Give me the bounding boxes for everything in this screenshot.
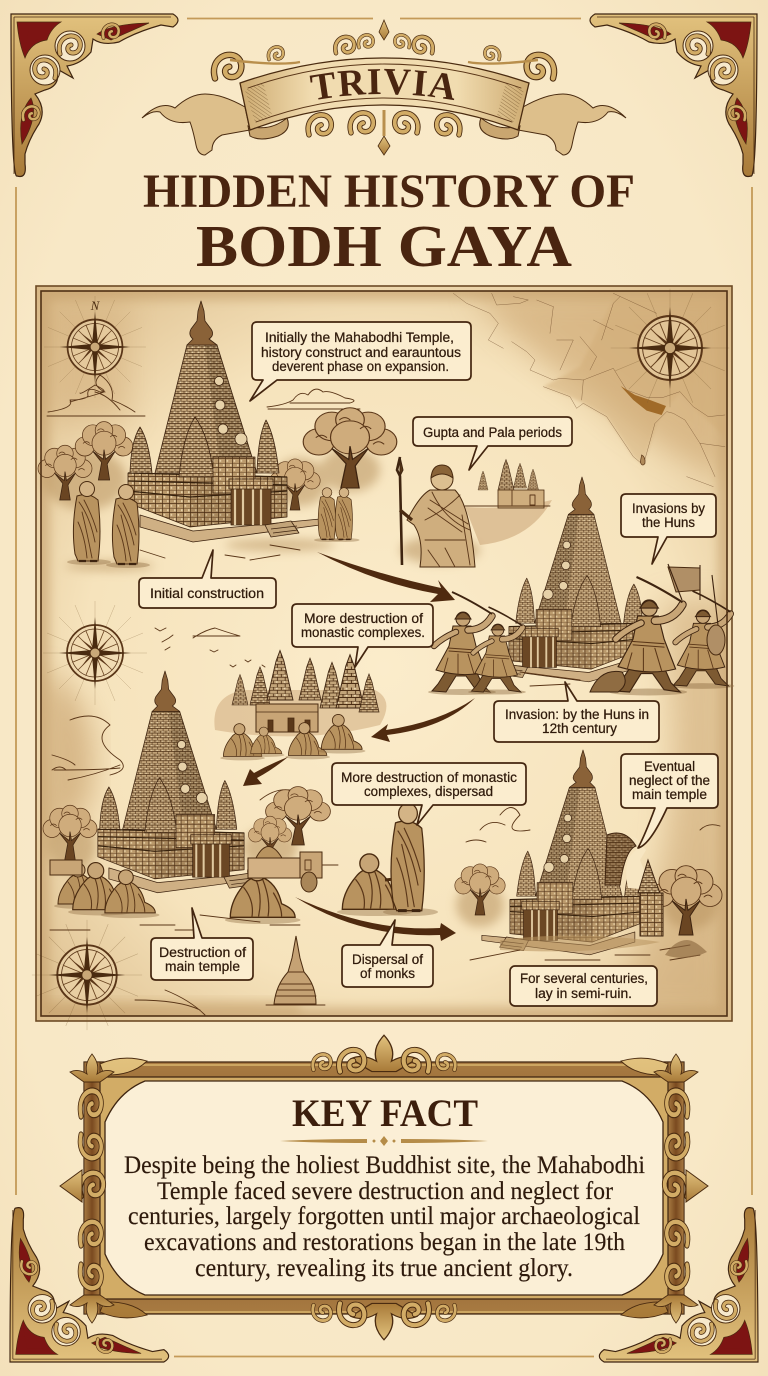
decorative corner: top left	[11, 14, 178, 176]
callout: semi-ruin: For several centuries,	[520, 971, 648, 986]
temple: semi-ruin	[470, 750, 707, 960]
temple: initial construction	[128, 301, 320, 542]
callout: dispersal of monks: Dispersal of	[352, 952, 423, 967]
callout: Initial construction: Initial construction	[150, 586, 264, 601]
callout: neglect of main temple: Eventual	[644, 759, 695, 774]
key fact body text	[124, 1152, 645, 1282]
ribbon band	[240, 58, 529, 130]
callout: destruction of main temple: Destruction of	[159, 945, 246, 960]
key fact body text: centuries, largely forgotten until major archaeological	[128, 1203, 640, 1230]
temple: destruction scene	[98, 671, 274, 893]
arrow: complex to main temple	[243, 757, 288, 786]
left ribbon tail	[142, 94, 250, 155]
ribbon folds	[248, 118, 520, 139]
callout: destruction of monastic complexes	[292, 604, 433, 667]
trivia text: TRIVIA	[310, 68, 454, 100]
stupa	[135, 936, 325, 1015]
decorative corner: bottom left	[10, 1208, 169, 1362]
callout: neglect of main temple: neglect of the	[629, 773, 710, 788]
compass rose: top left	[44, 296, 146, 398]
title line 2: BODH GAYA	[196, 213, 572, 279]
monastic complex	[214, 651, 386, 760]
compass rose: middle left	[43, 601, 147, 705]
callout: initial temple description: deverent phase on expansion.	[272, 359, 449, 374]
panel: illustrated timeline map	[32, 286, 734, 1030]
compass rose: bottom left	[32, 920, 142, 1030]
arrow: first temple to invasion	[317, 552, 455, 602]
callout: destruction of monastic complexes: monastic complexes.	[301, 625, 425, 640]
trees and foliage	[38, 408, 722, 935]
callout: Huns in 12th century: 12th century	[542, 721, 617, 736]
map panel inner border	[41, 291, 727, 1016]
title line 1: HIDDEN HISTORY OF	[143, 165, 635, 218]
key fact body text: Despite being the holiest Buddhist site, the Mahabodhi	[124, 1152, 645, 1179]
callout: Invasions by the Huns	[621, 494, 716, 564]
map of South Asia	[453, 293, 725, 487]
title	[143, 165, 635, 279]
clouds and birds	[47, 375, 720, 842]
callout: destruction of monastic complexes: More destruction of	[304, 611, 423, 626]
compass rose: top right	[611, 289, 729, 407]
banner flourishes	[214, 20, 554, 155]
callout: Invasions by the Huns: Invasions by	[632, 501, 705, 516]
callout: neglect of main temple: main temple	[632, 787, 707, 802]
arrow: invasion to monastic complex	[371, 698, 475, 742]
callout: monastic complexes dispersed: complexes, dispersad	[364, 784, 493, 799]
panel: key fact frame	[60, 1035, 708, 1340]
arrow: temple to semi-ruin	[295, 897, 456, 941]
callout: initial temple description	[250, 322, 471, 401]
callout: monastic complexes dispersed	[332, 763, 526, 825]
callout: semi-ruin: lay in semi-ruin.	[535, 986, 632, 1001]
frame crests and corner leaves	[60, 1035, 708, 1340]
trivia banner	[142, 19, 626, 156]
temple: invasion scene	[481, 477, 644, 682]
callout: Gupta and Pala periods: Gupta and Pala periods	[423, 425, 562, 440]
callout: monastic complexes dispersed: More destruction of monastic	[341, 770, 517, 785]
callout: semi-ruin	[510, 966, 657, 1006]
small shrine buildings	[50, 846, 338, 892]
callout: Invasions by the Huns: the Huns	[642, 515, 695, 530]
compass rose: top left: N	[90, 299, 101, 313]
decorative corner: bottom right	[599, 1208, 758, 1362]
foliage and ground shading	[43, 448, 718, 929]
callout: Huns in 12th century	[494, 682, 659, 742]
callout: initial temple description: history construct and earauntous	[261, 345, 461, 360]
decorative corner: top right	[590, 14, 757, 176]
seated monks, lower left	[54, 862, 300, 924]
frame side scrolls	[80, 1091, 688, 1288]
key fact heading: KEY FACT	[292, 1092, 478, 1135]
callout: destruction of main temple	[151, 908, 253, 980]
callout: dispersal of monks: of monks	[360, 966, 415, 981]
key fact body text: century, revealing its true ancient glory.	[195, 1255, 573, 1282]
callout: neglect of main temple	[621, 754, 718, 848]
callout: dispersal of monks	[342, 920, 433, 987]
heading divider	[280, 1136, 488, 1146]
key fact body text: excavations and restorations began in the late 19th	[144, 1229, 625, 1256]
frame body	[84, 1062, 684, 1314]
callout: Huns in 12th century: Invasion: by the Huns in	[505, 707, 649, 722]
callout: initial temple description: Initially the Mahabodhi Temple,	[265, 330, 454, 345]
right ribbon tail	[518, 94, 626, 155]
key fact body text: Temple faced severe destruction and neglect for	[157, 1178, 614, 1205]
callout: Initial construction	[139, 550, 276, 608]
monks beside first temple	[67, 482, 360, 568]
distant town	[465, 460, 552, 545]
frame inner panel	[105, 1081, 663, 1295]
callout: Gupta and Pala periods	[413, 417, 572, 470]
callout: destruction of main temple: main temple	[165, 959, 240, 974]
kneeling and standing monks	[337, 803, 438, 916]
figure: Gupta period royal with spear	[397, 457, 475, 567]
invading soldiers	[428, 564, 734, 695]
